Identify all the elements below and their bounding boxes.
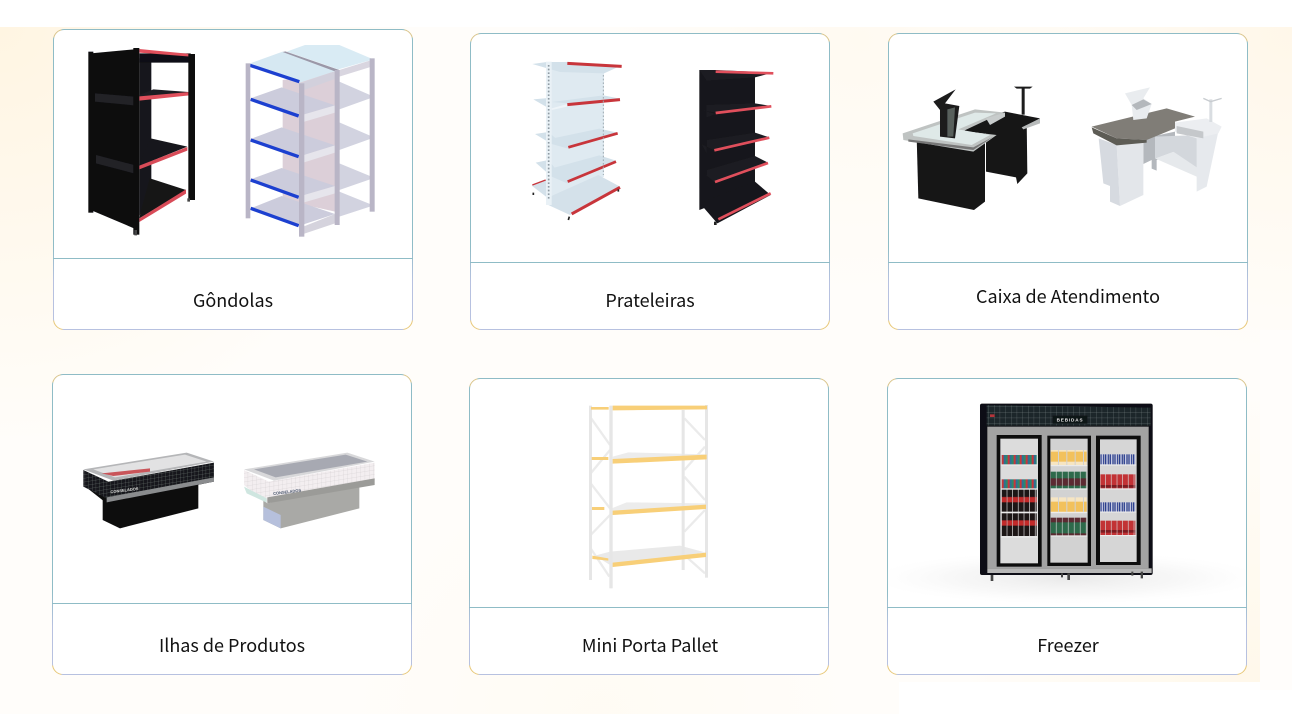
black shelf unit [699, 70, 773, 225]
black gondola [88, 48, 195, 235]
refrigerator body: BEBIDAS [1057, 417, 1083, 422]
label: Mini Porta Pallet: Mini Porta Pallet [582, 632, 718, 658]
product image: three-door refrigerator [959, 404, 1176, 592]
product image: island freezers [83, 452, 375, 528]
panel: Gôndolas [53, 29, 413, 330]
white island freezer: CONSELADOS [273, 488, 302, 496]
panel: Caixa de Atendimento [888, 33, 1248, 330]
label: Ilhas de Produtos: Ilhas de Produtos [159, 632, 305, 658]
label: Freezer: Freezer [1037, 632, 1099, 658]
white island freezer [244, 453, 375, 528]
label: Caixa de Atendimento: Caixa de Atendimento [976, 283, 1160, 309]
product image: pallet rack [589, 405, 708, 588]
panel: Prateleiras [470, 33, 830, 330]
white checkout counter [1092, 87, 1222, 206]
panel: Mini Porta Pallet [469, 378, 829, 675]
refrigerator body [980, 404, 1153, 581]
white and blue gondola [246, 45, 375, 237]
black island freezer [83, 453, 214, 528]
white shelf unit [532, 62, 622, 220]
product image: shelving units [532, 62, 774, 225]
panel: Freezer [887, 378, 1247, 675]
panel: Ilhas de Produtos [52, 374, 412, 675]
black island freezer: CONSELADOS [110, 486, 139, 494]
black checkout counter [903, 87, 1040, 210]
product image: gondola shelves [88, 45, 375, 237]
product image: checkout counters [902, 86, 1222, 210]
rack frame [589, 405, 708, 588]
label: Prateleiras: Prateleiras [605, 287, 695, 313]
label: Gôndolas: Gôndolas [193, 287, 273, 313]
